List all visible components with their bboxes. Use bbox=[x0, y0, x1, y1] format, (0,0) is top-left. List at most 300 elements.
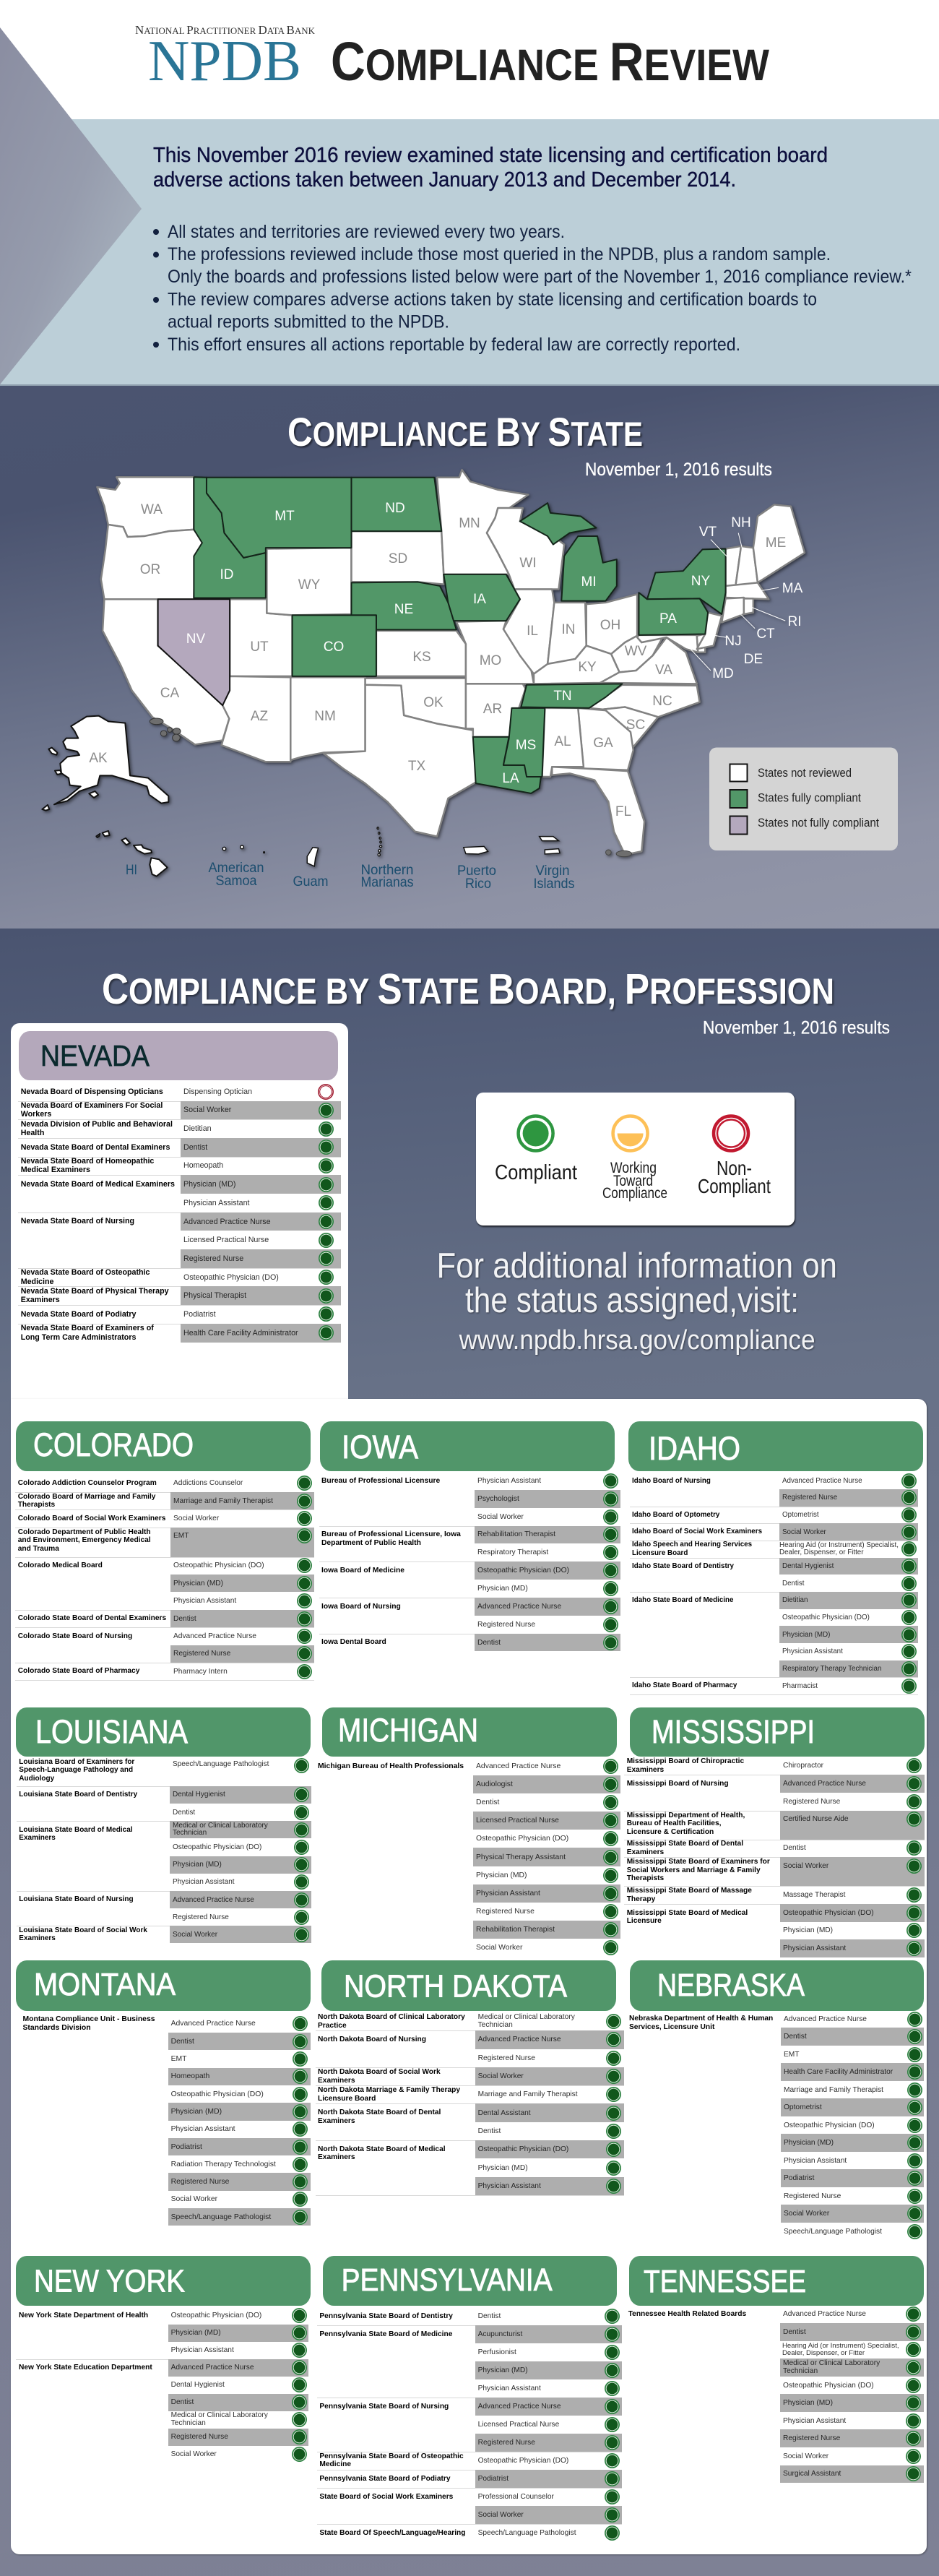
row: Long Term Care bbox=[21, 1324, 341, 1343]
row: Dental bbox=[321, 1634, 620, 1651]
state header: Idaho bbox=[628, 1421, 923, 1471]
row: Dentistry bbox=[630, 1558, 918, 1592]
state labels: NM bbox=[314, 709, 336, 724]
state labels: IN bbox=[562, 622, 575, 637]
additional information text bbox=[436, 1246, 837, 1356]
state labels: DE bbox=[744, 652, 763, 667]
row: Medical Examiners: Physician Assistant bbox=[173, 1878, 235, 1886]
row: Medicine bbox=[630, 1592, 918, 1677]
row: Medical Board: Osteopathic Physician (DO) bbox=[173, 1561, 264, 1569]
row: Department of Health: Marriage and Family Therapist bbox=[784, 2086, 883, 2094]
row: Department of Health: Physician Assistant bbox=[171, 2346, 234, 2354]
row: Medicine: Physician Assistant bbox=[782, 1647, 843, 1655]
row: Medicine: Osteopathic Physician (DO) bbox=[477, 1567, 569, 1575]
row: Addiction Counselor bbox=[15, 1474, 314, 1492]
row: Bureau of Health Professionals: Advanced Practice Nurse bbox=[476, 1762, 561, 1770]
row: Compliance Unit: EMT bbox=[171, 2055, 187, 2063]
row: Dentistry bbox=[17, 1786, 311, 1821]
row: Compliance Unit: Montana Compliance Unit - Business bbox=[23, 2015, 155, 2023]
row: Health Related Boards: Technician bbox=[783, 2367, 818, 2374]
row: Dental bbox=[316, 2103, 624, 2140]
row: Medical Examiners: Examiners bbox=[19, 1834, 56, 1842]
bullet list: All states and territories are reviewed every two years. bbox=[168, 222, 565, 242]
row: Nursing bbox=[624, 1775, 925, 1811]
row: Department of Health: Advanced Practice Nurse bbox=[784, 2015, 867, 2023]
row: Osteopathic Medicine: Medicine bbox=[319, 2460, 351, 2468]
additional information text: the status assigned,visit: bbox=[465, 1281, 799, 1320]
table: Iowa boards bbox=[319, 1473, 620, 1651]
row: Massage: Therapy bbox=[627, 1895, 655, 1903]
territory labels: American bbox=[208, 860, 264, 876]
state labels: TN bbox=[553, 689, 572, 704]
panel background: Nevada card bbox=[11, 1023, 348, 1406]
row: Nursing bbox=[319, 1598, 620, 1634]
row: Social Work: Social Worker bbox=[782, 1528, 826, 1536]
row: Medical Board: Physician Assistant bbox=[173, 1597, 236, 1605]
row: Pharmacy bbox=[15, 1663, 314, 1680]
table: Idaho boards bbox=[630, 1473, 918, 1695]
territory labels: Samoa bbox=[215, 873, 257, 889]
date note: November 1, 2016 results bbox=[585, 460, 772, 480]
row: Pharmacy: Colorado State Board of Pharmacy bbox=[18, 1667, 139, 1675]
row: Education Department: Medical or Clinical Laboratory bbox=[171, 2411, 268, 2419]
row: Medical Licensure: Licensure bbox=[627, 1917, 662, 1925]
state labels: OK bbox=[423, 695, 443, 710]
row: Nursing bbox=[317, 2398, 622, 2452]
additional information text: For additional information on bbox=[436, 1246, 837, 1285]
row: Dental: Dentist bbox=[173, 1615, 196, 1623]
icon: non-compliant bbox=[714, 1116, 748, 1150]
row: Bureau of Health Professionals bbox=[318, 1759, 620, 1955]
row: Public Health: and Trauma bbox=[18, 1545, 59, 1553]
row: Speech Language Hearing bbox=[319, 2525, 620, 2541]
row: Marriage and Family: Marriage and Family Therapist bbox=[478, 2090, 578, 2098]
row: Dental: Examiners bbox=[627, 1848, 664, 1856]
row: Podiatry bbox=[18, 1305, 341, 1324]
panel: Mississippi bbox=[624, 1707, 925, 1957]
row: Nursing: Registered Nurse bbox=[478, 2054, 535, 2062]
row: Social Work: North Dakota Board of Social Work bbox=[318, 2068, 441, 2076]
row: Dentistry bbox=[317, 2307, 622, 2325]
section 2 graphic: heading, legend and additional information bbox=[102, 965, 890, 1356]
Alaska, Hawaii and California islands bbox=[42, 716, 181, 876]
table: North Dakota boards bbox=[316, 2013, 624, 2196]
state labels: ID bbox=[220, 567, 234, 582]
state header: Iowa bbox=[320, 1421, 615, 1471]
row: Medicine: Physician (MD) bbox=[478, 2366, 528, 2374]
state labels: AK bbox=[89, 751, 108, 766]
row: Health Related Boards: Advanced Practice Nurse bbox=[783, 2310, 866, 2318]
row: Social Workers and Marriage: Therapists bbox=[627, 1874, 664, 1882]
row: Dental: Dental Assistant bbox=[478, 2109, 531, 2117]
row: Optometry: Idaho Board of Optometry bbox=[632, 1511, 719, 1519]
state labels: ND bbox=[385, 501, 405, 516]
state header: Michigan: MICHIGAN bbox=[338, 1712, 478, 1749]
row: Dentistry: Dental Hygienist bbox=[173, 1791, 225, 1799]
row: Medical Licensure: Osteopathic Physician (DO) bbox=[783, 1909, 874, 1917]
row: Speech and Hearing bbox=[630, 1541, 918, 1558]
row: Department of Health: Bureau of Health Facilities, bbox=[627, 1819, 721, 1827]
status legend bbox=[476, 1093, 795, 1225]
state labels: NH bbox=[731, 515, 751, 530]
row: Social Workers: Workers bbox=[21, 1110, 51, 1119]
row: Public Health: EMT bbox=[173, 1532, 189, 1540]
panel: North Dakota bbox=[316, 1960, 624, 2196]
logo: NPDB: NPDB bbox=[148, 30, 301, 93]
table: Mississippi boards bbox=[624, 1757, 925, 1957]
label: working toward compliance bbox=[602, 1160, 667, 1202]
row: Public and Behavioral Health bbox=[18, 1119, 341, 1138]
row: Nursing: Idaho Board of Nursing bbox=[632, 1477, 711, 1485]
row: Dispensing Opticians: Dispensing Optician bbox=[183, 1087, 252, 1096]
row: Health Related Boards: Registered Nurse bbox=[783, 2434, 840, 2442]
row: Department of Public Health: Respiratory Therapist bbox=[477, 1548, 548, 1556]
table: Tennessee boards bbox=[628, 2306, 924, 2483]
row: Medical Examiners: Louisiana State Board of Medical bbox=[19, 1826, 133, 1834]
row: Bureau of Health Professionals: Rehabilitation Therapist bbox=[476, 1926, 555, 1934]
row: Dental: Dentist bbox=[477, 1639, 501, 1647]
row: Nursing: Registered Nurse bbox=[183, 1254, 243, 1263]
row: Department of Health: Osteopathic Physician (DO) bbox=[784, 2121, 875, 2129]
row: Dental: Examiners bbox=[318, 2117, 355, 2125]
row: Social Work: Louisiana State Board of Social Work bbox=[19, 1926, 147, 1934]
row: Dental bbox=[15, 1610, 314, 1627]
row: Department of Health: Social Worker bbox=[784, 2210, 829, 2218]
panel: Pennsylvania bbox=[317, 2256, 622, 2541]
row: Medicine: Pennsylvania State Board of Medicine bbox=[319, 2330, 452, 2338]
row: Podiatry bbox=[317, 2470, 622, 2488]
row: Podiatry: Nevada State Board of Podiatry bbox=[21, 1310, 136, 1319]
table: Montana boards bbox=[23, 2015, 311, 2226]
row: Department of Health: Physician (MD) bbox=[171, 2329, 221, 2337]
state labels: NE bbox=[394, 602, 413, 617]
table: Michigan boards bbox=[318, 1759, 620, 1955]
row: Dental: Dentist bbox=[478, 2127, 501, 2135]
row: Professional Licensure: Social Worker bbox=[477, 1513, 524, 1521]
territory labels: Northern bbox=[361, 862, 413, 878]
intro text: This November 2016 review examined state licensing and certification board bbox=[153, 144, 828, 167]
row: Professional Licensure: Physician Assistant bbox=[477, 1477, 541, 1485]
row: Marriage and Family bbox=[316, 2085, 624, 2103]
top graphic: header, intro text and state map bbox=[0, 23, 912, 892]
row: Pharmacy bbox=[630, 1677, 918, 1694]
bullet list bbox=[153, 222, 912, 355]
row: Marriage and Family: Colorado Board of Marriage and Family bbox=[18, 1493, 155, 1501]
row: Department of Health: Registered Nurse bbox=[784, 2192, 841, 2200]
row: Physical Therapy: Physical Therapist bbox=[183, 1291, 246, 1300]
state header: New York bbox=[16, 2256, 311, 2306]
row: Dentistry: Dentist bbox=[173, 1809, 195, 1817]
row: Social Workers: Social Worker bbox=[183, 1106, 231, 1114]
state labels: MS bbox=[516, 738, 536, 753]
row: Bureau of Health Professionals: Physical Therapy Assistant bbox=[476, 1853, 566, 1861]
state labels: AR bbox=[483, 702, 502, 717]
row: Compliance Unit: Osteopathic Physician (DO) bbox=[171, 2090, 264, 2098]
row: Bureau of Health Professionals: Physician (MD) bbox=[476, 1871, 527, 1879]
panel: Idaho bbox=[628, 1421, 923, 1695]
row: Dentistry: Idaho State Board of Dentistry bbox=[632, 1562, 734, 1570]
row: Dental Examiners bbox=[18, 1138, 341, 1157]
label: non-compliant: Compliant bbox=[698, 1175, 771, 1197]
row: Medical Examiners: Physician (MD) bbox=[173, 1861, 222, 1869]
panel: New York bbox=[16, 2256, 311, 2462]
row: Speech and Hearing: Licensure Board bbox=[632, 1549, 688, 1557]
row: Department of Health bbox=[624, 1811, 925, 1840]
state header: New York: NEW YORK bbox=[34, 2264, 185, 2299]
row: Optometry bbox=[630, 1507, 918, 1523]
territory labels: HI bbox=[126, 862, 137, 878]
heading: Compliance by State Board, Profession: COMPLIANCE BY STATE BOARD, PROFESSION bbox=[102, 965, 834, 1013]
row: Dentistry: Dentist bbox=[782, 1580, 805, 1588]
state labels: IA bbox=[473, 592, 486, 607]
row: Medical: Examiners bbox=[318, 2153, 355, 2161]
row: Nursing: Licensed Practical Nurse bbox=[183, 1236, 269, 1244]
row: Department of Public Health: Bureau of Professional Licensure, Iowa bbox=[321, 1530, 461, 1538]
section background: compliance by state board bbox=[0, 929, 939, 2576]
row: Public and Behavioral Health: Dietitian bbox=[183, 1124, 212, 1133]
table: Pennsylvania boards bbox=[317, 2309, 622, 2541]
row: Medicine bbox=[319, 1561, 620, 1598]
row: Speech and Hearing: Dealer, Dispenser, or Fitter bbox=[779, 1548, 864, 1556]
row: Nursing: Registered Nurse bbox=[783, 1798, 840, 1806]
row: Health Related Boards: Social Worker bbox=[783, 2452, 828, 2460]
row: Speech and Hearing: Idaho Speech and Hearing Services bbox=[632, 1541, 752, 1548]
section background: intro band bbox=[0, 119, 939, 384]
map legend: States not fully compliant bbox=[758, 816, 879, 830]
map legend bbox=[709, 747, 898, 850]
row: Social Work: Idaho Board of Social Work Examiners bbox=[632, 1528, 762, 1535]
state labels: NJ bbox=[724, 634, 742, 649]
row: Bureau of Health Professionals: Osteopathic Physician (DO) bbox=[476, 1835, 568, 1843]
row: Addiction Counselor: Addictions Counselor bbox=[173, 1479, 243, 1487]
row: Department of Health: Physician (MD) bbox=[784, 2139, 834, 2147]
row: Dental Examiners: Dentist bbox=[183, 1143, 207, 1152]
row: Medical Examiners: Medical or Clinical Laboratory bbox=[173, 1822, 268, 1830]
state labels: MI bbox=[581, 574, 597, 590]
row: Department of Public Health: Department of Public Health bbox=[321, 1539, 421, 1547]
panel: Montana bbox=[16, 1960, 311, 2226]
row: Social Work bbox=[15, 1509, 314, 1528]
row: Long Term Care: Nevada State Board of Examiners of bbox=[21, 1324, 154, 1332]
state header: Nevada bbox=[19, 1031, 338, 1080]
row: Medical Licensure bbox=[627, 1904, 925, 1957]
row: Nursing: Registered Nurse bbox=[782, 1494, 837, 1502]
state labels: ME bbox=[766, 535, 786, 551]
row: Speech-Language: Speech-Language Pathology and bbox=[19, 1766, 133, 1774]
row: Education Department bbox=[19, 2359, 308, 2462]
row: Pharmacy: Pharmacist bbox=[782, 1682, 818, 1689]
row: Osteopathic Medicine: Osteopathic Physician (DO) bbox=[183, 1273, 279, 1282]
row: Compliance Unit: Physician (MD) bbox=[171, 2108, 222, 2116]
state labels: PA bbox=[659, 611, 677, 626]
state header: Louisiana: LOUISIANA bbox=[35, 1713, 188, 1750]
row: Social Work: Social Worker bbox=[173, 1931, 217, 1939]
bullet list: actual reports submitted to the NPDB. bbox=[168, 312, 449, 332]
row: Compliance Unit bbox=[23, 2015, 311, 2226]
row: Nursing: Advanced Practice Nurse bbox=[478, 2036, 561, 2043]
table: Louisiana boards bbox=[17, 1757, 311, 1943]
row: Compliance Unit: Social Worker bbox=[171, 2195, 217, 2203]
row: Nursing bbox=[630, 1473, 918, 1507]
row: Professional Licensure: Psychologist bbox=[477, 1495, 519, 1503]
state header: Tennessee bbox=[629, 2256, 924, 2306]
row: Social Work bbox=[316, 2067, 624, 2085]
date note: November 1, 2016 results bbox=[703, 1017, 890, 1038]
row: Nursing: Advanced Practice Nurse bbox=[173, 1632, 256, 1640]
row: Health Related Boards: Osteopathic Physician (DO) bbox=[783, 2382, 874, 2390]
row: Medical Examiners: Osteopathic Physician (DO) bbox=[173, 1843, 261, 1851]
row: Podiatry: Podiatrist bbox=[183, 1310, 216, 1319]
row: Nursing bbox=[18, 1212, 341, 1268]
row: Social Workers and Marriage: Mississippi State Board of Examiners for bbox=[627, 1858, 770, 1866]
row: Education Department: Dentist bbox=[171, 2398, 194, 2406]
state header: Mississippi bbox=[630, 1707, 925, 1756]
row: Nursing: Louisiana State Board of Nursing bbox=[19, 1895, 134, 1903]
row: Education Department: New York State Education Department bbox=[19, 2364, 152, 2372]
state header: Louisiana bbox=[16, 1707, 311, 1756]
row: Pharmacy: Idaho State Board of Pharmacy bbox=[632, 1681, 737, 1689]
row: Bureau of Health Professionals: Dentist bbox=[476, 1799, 499, 1806]
row: Social Work: Professional Counselor bbox=[478, 2493, 554, 2501]
panel: Colorado bbox=[15, 1421, 314, 1681]
row: Social Work bbox=[630, 1523, 918, 1541]
state header: Montana: MONTANA bbox=[34, 1967, 176, 2002]
panel: Nebraska bbox=[629, 1960, 924, 2239]
row: Medical Board: Colorado Medical Board bbox=[18, 1561, 103, 1569]
row: Health Related Boards: Surgical Assistant bbox=[783, 2470, 841, 2478]
row: Chiropractic: Mississippi Board of Chiropractic bbox=[627, 1757, 744, 1765]
row: Medical Licensure: Physician (MD) bbox=[783, 1926, 833, 1934]
row: Medical: Physician Assistant bbox=[478, 2182, 541, 2190]
state labels: OR bbox=[140, 562, 160, 577]
row: Social Work bbox=[317, 2488, 622, 2524]
row: Osteopathic Medicine: Osteopathic Physician (DO) bbox=[478, 2457, 568, 2465]
row: Department of Health: Mississippi Department of Health, bbox=[627, 1812, 745, 1819]
label: working toward compliance: Compliance bbox=[602, 1185, 667, 1202]
row: Department of Health: Licensure & Certification bbox=[627, 1828, 714, 1836]
state labels: NC bbox=[652, 694, 672, 709]
row: Chiropractic: Chiropractor bbox=[783, 1762, 823, 1770]
row: Medical: North Dakota State Board of Medical bbox=[318, 2145, 446, 2153]
row: Nursing: Iowa Board of Nursing bbox=[321, 1603, 401, 1611]
state header: Iowa: IOWA bbox=[342, 1429, 418, 1465]
label: compliant: Compliant bbox=[495, 1161, 577, 1184]
row: Marriage and Family: North Dakota Marriage & Family Therapy bbox=[318, 2086, 460, 2094]
row: Compliance Unit: Physician Assistant bbox=[171, 2125, 235, 2133]
state labels: MO bbox=[480, 653, 501, 668]
state labels: MN bbox=[459, 516, 480, 531]
state labels: WA bbox=[141, 502, 163, 517]
row: Nursing: Advanced Practice Nurse bbox=[783, 1780, 866, 1788]
map of the United States bbox=[42, 470, 805, 876]
row: Optometry: Optometrist bbox=[782, 1511, 819, 1519]
row: Long Term Care: Long Term Care Administrators bbox=[21, 1333, 136, 1342]
row: Professional Licensure: Bureau of Professional Licensure bbox=[321, 1477, 440, 1485]
row: Clinical Laboratory: Technician bbox=[478, 2021, 513, 2029]
row: Dentistry: Louisiana State Board of Dentistry bbox=[19, 1791, 137, 1799]
row: Nursing: Pennsylvania State Board of Nursing bbox=[319, 2403, 449, 2411]
state labels: TX bbox=[408, 759, 425, 774]
row: Compliance Unit: Radiation Therapy Technologist bbox=[171, 2161, 276, 2168]
row: Nursing: Advanced Practice Nurse bbox=[183, 1218, 271, 1226]
row: Education Department: Social Worker bbox=[171, 2450, 217, 2458]
row: Nursing: Nevada State Board of Nursing bbox=[21, 1217, 134, 1225]
row: Speech-Language: Audiology bbox=[19, 1775, 54, 1782]
row: Medicine: Dietitian bbox=[782, 1596, 808, 1604]
row: Department of Health: Certified Nurse Aide bbox=[783, 1815, 849, 1823]
state labels: UT bbox=[250, 639, 269, 655]
territory labels bbox=[126, 860, 575, 892]
row: Education Department: Technician bbox=[171, 2419, 206, 2427]
row: Marriage and Family: Licensure Board bbox=[318, 2095, 376, 2103]
territory labels: Marianas bbox=[361, 874, 414, 890]
panel: Michigan bbox=[318, 1707, 620, 1955]
row: Medicine: Iowa Board of Medicine bbox=[321, 1567, 404, 1575]
row: Podiatry: Pennsylvania State Board of Podiatry bbox=[319, 2475, 451, 2483]
row: Nursing: North Dakota Board of Nursing bbox=[318, 2036, 426, 2043]
row: Medicine: Acupuncturist bbox=[478, 2330, 522, 2338]
state header: North Dakota bbox=[321, 1960, 616, 2011]
row: Education Department: Advanced Practice Nurse bbox=[171, 2364, 254, 2372]
label: working toward compliance: Working bbox=[610, 1160, 657, 1176]
state labels: AZ bbox=[251, 709, 269, 724]
row: Homeopathic Medical Examiners: Homeopath bbox=[183, 1161, 223, 1170]
row: Marriage and Family: Marriage and Family Therapist bbox=[173, 1497, 273, 1505]
additional information text: www.npdb.hrsa.gov/compliance bbox=[459, 1325, 815, 1356]
row: Health Related Boards: Physician (MD) bbox=[783, 2399, 833, 2407]
row: Health Related Boards: Medical or Clinical Laboratory bbox=[783, 2359, 880, 2367]
bullet list: The professions reviewed include those most queried in the NPDB, plus a random sample. bbox=[168, 244, 831, 264]
row: Osteopathic Medicine: Pennsylvania State Board of Osteopathic bbox=[319, 2452, 464, 2460]
row: Compliance Unit: Standards Division bbox=[23, 2024, 91, 2032]
map legend: States fully compliant bbox=[758, 791, 861, 805]
label: non-compliant bbox=[698, 1157, 771, 1197]
row: Dental Examiners: Nevada State Board of Dental Examiners bbox=[21, 1143, 170, 1152]
intro text bbox=[153, 144, 828, 191]
state header: Nebraska: NEBRASKA bbox=[657, 1968, 805, 2003]
row: Health Related Boards: Tennessee Health Related Boards bbox=[628, 2310, 746, 2318]
row: Medicine: Physician (MD) bbox=[782, 1631, 830, 1639]
state header: Pennsylvania: PENNSYLVANIA bbox=[342, 2262, 553, 2298]
state labels: VT bbox=[699, 525, 717, 540]
row: Bureau of Health Professionals: Registered Nurse bbox=[476, 1908, 535, 1916]
state labels: VA bbox=[655, 663, 672, 678]
row: Nursing: Registered Nurse bbox=[173, 1913, 229, 1921]
row: Department of Health: Speech/Language Pathologist bbox=[784, 2228, 882, 2236]
state labels: IL bbox=[527, 624, 538, 639]
table: New York boards bbox=[16, 2308, 308, 2462]
row: Nursing bbox=[15, 1627, 314, 1663]
row: Medical Board bbox=[15, 1557, 314, 1610]
row: Osteopathic Medicine: Medicine bbox=[21, 1278, 53, 1286]
state header: Michigan bbox=[322, 1707, 617, 1756]
table: Colorado boards bbox=[15, 1476, 314, 1681]
logo: NPDB: NATIONAL PRACTITIONER DATA BANK bbox=[135, 23, 316, 37]
row: Podiatry: Podiatrist bbox=[478, 2475, 509, 2483]
row: Nursing: Licensed Practical Nurse bbox=[478, 2421, 559, 2429]
state labels: NV bbox=[186, 632, 206, 647]
row: Dental: North Dakota State Board of Dental bbox=[318, 2108, 441, 2116]
territory labels: Puerto bbox=[457, 863, 496, 879]
row: Medicine: Physician (MD) bbox=[477, 1585, 528, 1593]
row: Nursing: Mississippi Board of Nursing bbox=[627, 1780, 729, 1788]
state labels: LA bbox=[502, 771, 519, 786]
territory labels: Guam bbox=[293, 874, 328, 889]
row: Nursing: Colorado State Board of Nursing bbox=[18, 1632, 132, 1640]
row: Clinical Laboratory: North Dakota Board of Clinical Laboratory bbox=[318, 2013, 465, 2021]
state labels: CA bbox=[160, 686, 180, 701]
state header: North Dakota: NORTH DAKOTA bbox=[344, 1969, 568, 2004]
